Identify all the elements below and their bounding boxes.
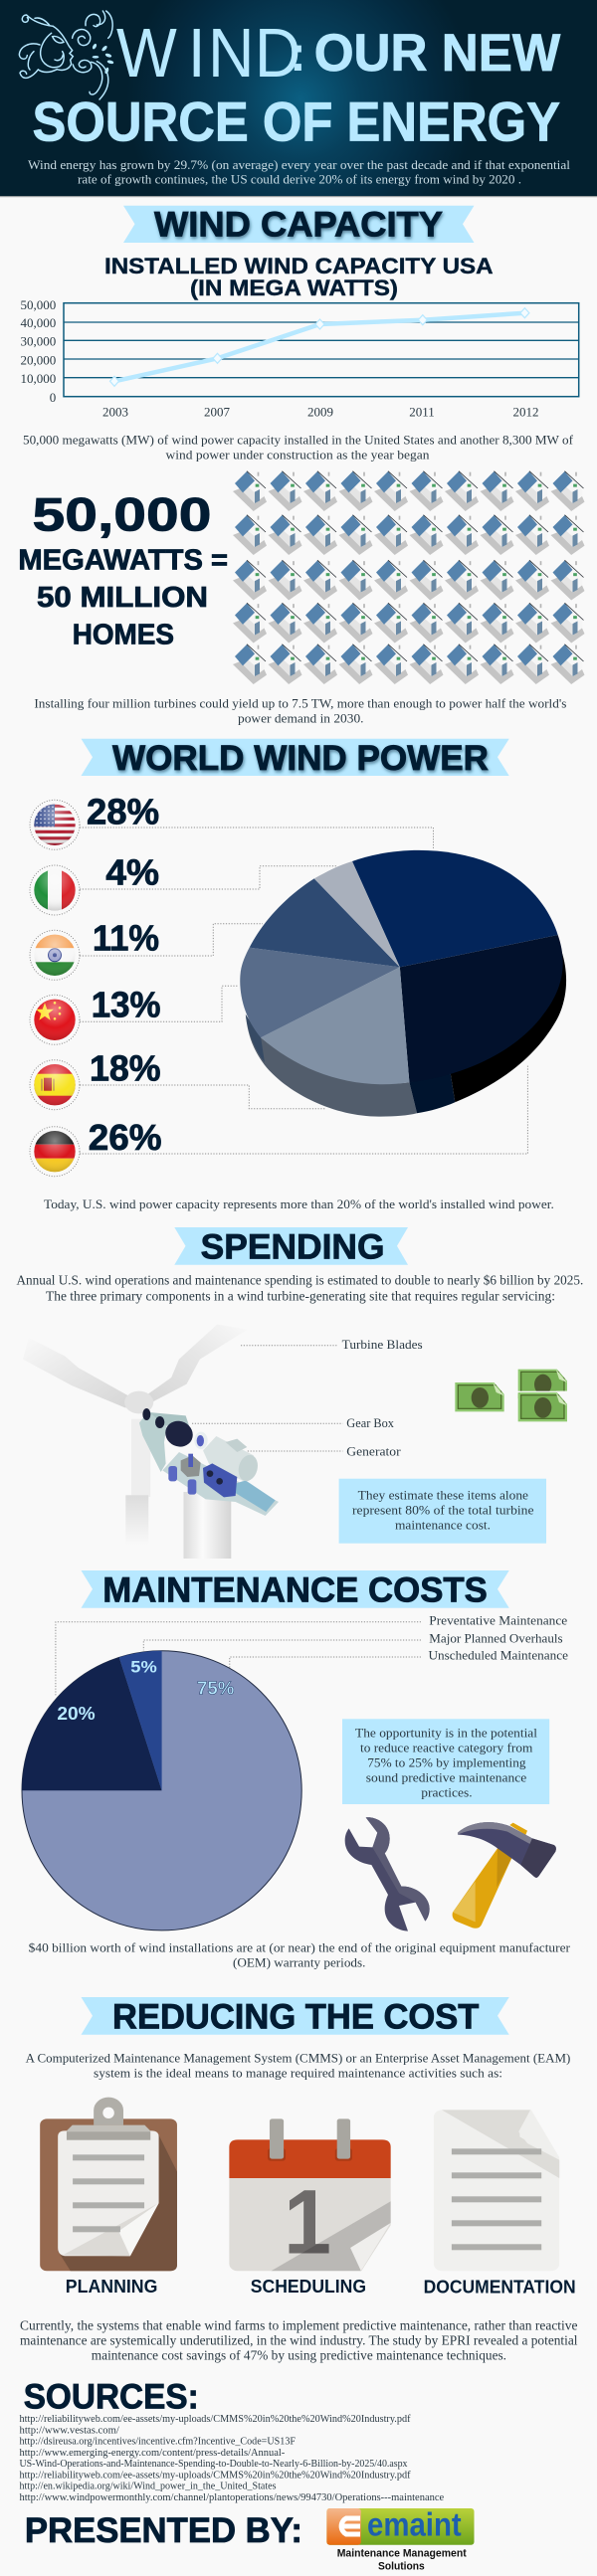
flag: Italy with 4%: 4%	[105, 851, 159, 892]
text: warranty	[29, 1940, 571, 1970]
line chart: 20,000	[21, 352, 56, 368]
pie chart: maintenance costs: 75%	[197, 1678, 234, 1698]
flag: India with 11%: 11%	[93, 918, 159, 959]
title: OUR NEW	[314, 24, 560, 83]
text: four million turbines: power demand in 2030.	[238, 711, 364, 726]
callout: opportunity: practices.	[421, 1785, 473, 1800]
heading: wind capacity: WIND CAPACITY	[154, 205, 443, 244]
flag: USA with 28%	[30, 798, 159, 850]
text: US share: Today, U.S. wind power capacity represents more than 20% of the world's installed wind power.	[44, 1196, 554, 1211]
source links: US-Wind-Operations-and-Maintenance-Spending-to-Double-to-Nearly-6-Billion-by-2025/40.aspx	[20, 2459, 408, 2470]
line chart: 50,000	[21, 297, 56, 312]
labels: activities: DOCUMENTATION	[424, 2278, 576, 2298]
source links: http://dsireusa.org/incentives/incentive.cfm?Incentive_Code=US13F	[20, 2437, 296, 2448]
line chart: 10,000	[21, 371, 56, 386]
line chart: 2009	[307, 404, 333, 419]
line chart: 0	[50, 390, 56, 405]
icon: hammer	[453, 1822, 556, 1929]
intro text: rate of growth continues, the US could derive 20% of its energy from wind by 2020 .	[78, 171, 521, 186]
slice: Germany 26%	[400, 935, 563, 1082]
slice: India 11%	[250, 878, 400, 967]
tower	[183, 1492, 231, 1559]
callout: 80% of cost: maintenance cost.	[395, 1518, 491, 1533]
line chart: 2012	[513, 404, 539, 419]
text: warranty: (OEM) warranty periods.	[233, 1955, 365, 1970]
callout: 80% of cost	[339, 1479, 546, 1544]
text: spending intro: The three primary components in a wind turbine-generating site that requires regular servicing:	[46, 1288, 555, 1303]
callouts: turbine parts	[192, 1337, 423, 1458]
line chart: 2011	[409, 404, 435, 419]
text: capacity installed: 50,000 megawatts (MW) of wind power capacity installed in the United States and another 8,300 MW of	[23, 433, 574, 448]
logo: eMaint: emaint	[367, 2505, 462, 2542]
callouts: turbine parts: Turbine Blades	[342, 1337, 423, 1352]
source links: http://reliabilityweb.com/ee-assets/my-uploads/CMMS%20in%20the%20Wind%20Industry.pdf	[20, 2414, 411, 2425]
labels: activities: SCHEDULING	[251, 2277, 366, 2297]
pie chart: maintenance costs	[22, 1651, 301, 1931]
slice: Italy 4%	[314, 861, 400, 967]
callouts: turbine parts: Generator	[346, 1443, 401, 1458]
logo: eMaint: Maintenance Management	[337, 2548, 467, 2560]
flag: USA with 28%: 28%	[87, 791, 159, 831]
title: :	[290, 26, 306, 82]
illustration: wind turbine	[23, 1325, 279, 1559]
heading: spending: SPENDING	[201, 1228, 384, 1267]
source links	[20, 2414, 445, 2503]
chart title: INSTALLED WIND CAPACITY USA	[104, 254, 494, 278]
slice: USA 28%	[352, 850, 558, 967]
text: four million turbines: Installing four million turbines could yield up to 7.5 TW, more than enough to power half the world's	[34, 696, 566, 711]
blades	[23, 1325, 248, 1545]
callout: opportunity	[342, 1719, 549, 1804]
icon: document	[434, 2109, 561, 2271]
source links: http://www.vestas.com/	[20, 2425, 119, 2436]
logo: eMaint	[326, 2505, 474, 2572]
source links: http://www.windpowermonthly.com/channel/plantoperations/news/994730/Operations---maintenance	[20, 2492, 445, 2503]
text: predictive maintenance: maintenance are systemically underutilized, in the wind industry. The study by EPRI revealed a potential	[20, 2333, 578, 2348]
heading: reducing the cost: REDUCING THE COST	[112, 1997, 479, 2036]
legend: maintenance types: Major Planned Overhauls	[429, 1631, 563, 1646]
line chart: 2003	[102, 404, 128, 419]
nacelle machinery	[139, 1408, 279, 1516]
intro text	[28, 157, 570, 186]
pie chart: maintenance costs: 20%	[57, 1704, 96, 1724]
line chart: 30,000	[21, 334, 56, 348]
chart title	[104, 254, 494, 300]
chart title: (IN MEGA WATTS)	[190, 276, 398, 300]
text: capacity installed	[23, 433, 574, 462]
heading: sources: SOURCES:	[24, 2378, 199, 2417]
icon: calendar	[229, 2118, 392, 2273]
slice: Spain 18%	[261, 967, 409, 1084]
text: spending intro	[16, 1273, 583, 1303]
text: CMMS intro	[26, 2050, 570, 2080]
big stat: 50,000 megawatts: 50 MILLION	[37, 582, 208, 614]
callout: 80% of cost: represent 80% of the total turbine	[352, 1503, 534, 1518]
text: predictive maintenance: Currently, the systems that enable wind farms to implement predictive maintenance, rather than reactive	[20, 2318, 577, 2333]
legend: maintenance types: Preventative Maintenance	[429, 1612, 567, 1627]
callouts: turbine parts: Gear Box	[346, 1415, 394, 1430]
heading: maintenance costs: MAINTENANCE COSTS	[102, 1571, 488, 1610]
flag: Germany with 26%	[30, 1124, 161, 1178]
text: CMMS intro: system is the ideal means to manage required maintenance activities such as:	[94, 2065, 502, 2080]
big stat: 50,000 megawatts: MEGAWATTS =	[18, 545, 228, 577]
flag: India with 11%	[30, 918, 159, 980]
flag: Spain with 18%	[30, 1048, 161, 1110]
logo: eMaint: Solutions	[378, 2560, 425, 2572]
text: warranty: $40 billion worth of wind installations are at (or near) the end of the original equipment manufacturer	[29, 1940, 571, 1955]
icon: calendar: 1	[284, 2171, 331, 2273]
pie side walls	[246, 952, 566, 1117]
title: SOURCE OF ENERGY	[32, 91, 560, 153]
line chart: 2007	[204, 404, 231, 419]
3D pie chart: world wind power	[240, 850, 566, 1117]
text: capacity installed: wind power under construction as the year began	[165, 448, 430, 462]
text: four million turbines	[34, 696, 566, 726]
icon: clipboard	[40, 2098, 177, 2271]
pie connector lines	[80, 828, 527, 1154]
flag: China with 13%	[30, 991, 160, 1045]
flag: Germany with 26%: 26%	[89, 1117, 162, 1158]
icon: wrench	[345, 1817, 430, 1932]
callout: 80% of cost: They estimate these items alone	[358, 1488, 528, 1503]
big stat: 50,000 megawatts: 50,000	[32, 487, 211, 540]
slice: China 13%	[240, 948, 400, 1037]
callout: opportunity: to reduce reactive category from	[360, 1741, 532, 1755]
text: predictive maintenance: maintenance cost savings of 47% by using predictive maintenance techniques.	[92, 2348, 506, 2363]
text: predictive maintenance	[20, 2318, 578, 2363]
source links: http://en.wikipedia.org/wiki/Wind_power_in_the_United_States	[20, 2482, 277, 2492]
labels: activities: PLANNING	[66, 2277, 157, 2297]
header panel	[0, 0, 597, 197]
flag: Spain with 18%: 18%	[90, 1048, 161, 1089]
text: spending intro: Annual U.S. wind operations and maintenance spending is estimated to double to nearly $6 billion by 2025.	[16, 1273, 583, 1288]
flag: Italy with 4%	[30, 859, 159, 915]
title: WIND	[116, 15, 300, 92]
source links: http://reliabilityweb.com/ee-assets/my-uploads/CMMS%20in%20the%20Wind%20Industry.pdf	[20, 2470, 411, 2481]
legend: maintenance types: Unscheduled Maintenance	[428, 1648, 568, 1663]
line chart	[21, 297, 579, 419]
flag: China with 13%: 13%	[92, 984, 161, 1024]
icon grid: houses	[233, 471, 584, 684]
heading: world wind power: WORLD WIND POWER	[112, 739, 489, 778]
text: CMMS intro: A Computerized Maintenance Management System (CMMS) or an Enterprise Asset Management (EAM)	[26, 2050, 570, 2065]
heading: presented by: PRESENTED BY:	[25, 2511, 302, 2550]
callout: opportunity: The opportunity is in the potential	[355, 1726, 537, 1741]
callout: opportunity: 75% to 25% by implementing	[367, 1755, 526, 1770]
labels: activities	[66, 2277, 576, 2298]
title	[32, 15, 560, 153]
legend: maintenance types	[56, 1612, 568, 1696]
big stat: 50,000 megawatts	[18, 487, 228, 650]
pie chart: maintenance costs: 5%	[130, 1658, 157, 1677]
icon: money bills	[455, 1368, 568, 1421]
icon: wind face logo	[19, 11, 114, 99]
intro text: Wind energy has grown by 29.7% (on average) every year over the past decade and if that exponential	[28, 157, 570, 172]
big stat: 50,000 megawatts: HOMES	[73, 619, 174, 650]
source links: http://www.emerging-energy.com/content/press-details/Annual-	[20, 2448, 286, 2459]
line chart: 40,000	[21, 315, 56, 330]
callout: opportunity: sound predictive maintenance	[366, 1770, 527, 1785]
